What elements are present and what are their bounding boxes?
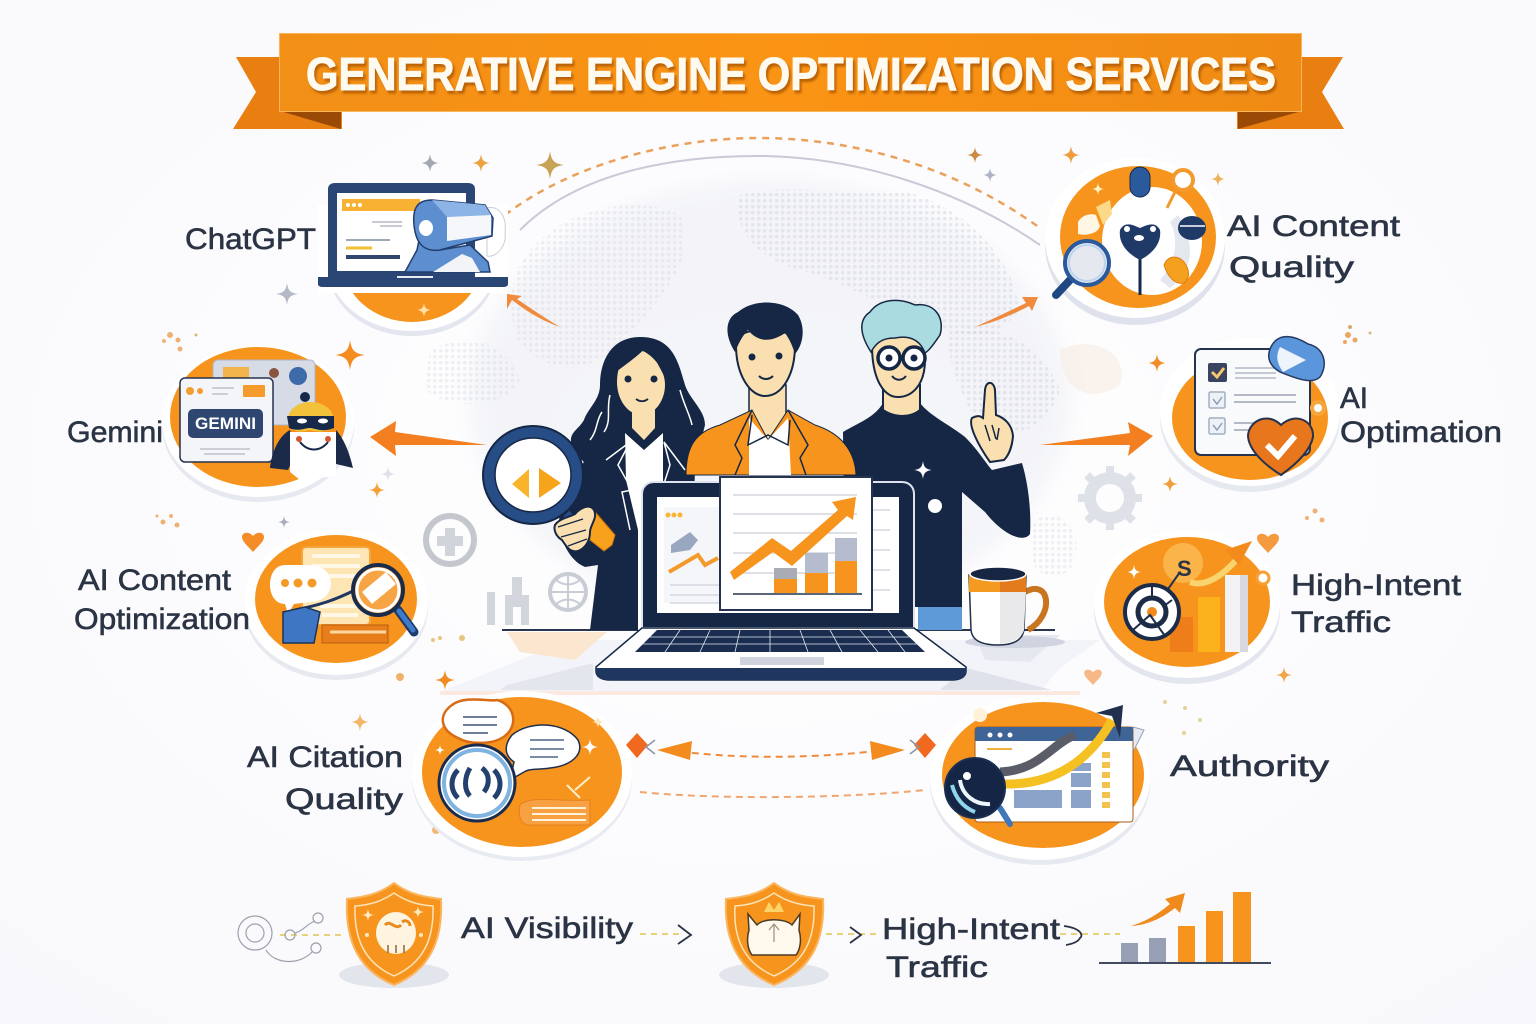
arrow: to ChatGPT [507,294,560,327]
panel: Gemini [67,345,354,502]
figure: man with glasses [843,300,1030,630]
icon: laptop with printer [318,183,508,317]
figure: woman [559,337,705,630]
label: AI Content [78,564,232,597]
label [1227,210,1401,284]
label: Optimization [74,603,250,636]
arrow: to AI Optimation [1040,422,1153,456]
panel: AI Citation Quality [247,691,632,861]
label: AI Citation [247,741,403,774]
label: ChatGPT [185,223,316,256]
panel: AI Content Quality [1045,158,1401,325]
desk [440,629,1100,695]
panel: AI Content Optimization [74,529,428,680]
chart card on laptop [720,477,872,610]
bottom flow: AI Visibility to High-Intent Traffic [238,883,1271,988]
label: Quality [285,783,403,816]
icon: browser window with arrow and magnifier [945,705,1144,824]
label: Traffic [1291,606,1391,639]
label: High-Intent Traffic [882,913,1061,984]
label: Authority [1170,750,1329,783]
panel: Authority [930,696,1329,865]
panel: ChatGPT [185,183,508,336]
icon: shield two [719,883,829,988]
chart: growth bars [1099,892,1271,964]
laptop [596,482,966,680]
magnifier held by woman [483,426,615,551]
icon: gear [1078,466,1142,530]
arrow: dashed links between lower panels [626,733,936,797]
label: AI [1340,382,1368,415]
label [1291,569,1462,639]
label [247,741,403,816]
label: High-Intent [1291,569,1462,602]
panel: AI Optimation [1160,337,1502,492]
label: High-Intent Traffic: Traffic [886,951,988,984]
label: Quality [1229,251,1354,284]
title text: GENERATIVE ENGINE OPTIMIZATION SERVICES [306,48,1276,100]
label [74,564,250,636]
label: AI Content [1227,210,1401,243]
arrow: to AI Content Quality [975,297,1038,327]
label: High-Intent Traffic: High-Intent [882,913,1061,946]
icon: quality pin and magnifier [1056,167,1206,295]
icon: chat bubbles and citation badge [435,699,604,825]
label [1340,382,1502,449]
dashed connectors [280,925,1120,945]
sparkles [156,146,1372,834]
panel: High-Intent Traffic [1094,530,1462,684]
icon: network doodle [238,913,323,962]
icon: shield one [339,883,449,988]
label: Gemini [67,416,163,449]
label: AI Visibility: AI Visibility [461,912,633,945]
text: GEMINI: GEMINI [195,414,256,433]
dashed arc [505,138,1040,228]
icon: target, growth bars and arrow [1125,541,1269,652]
world map backdrop [425,156,1122,620]
icon: document, speech bubble and magnifier [270,547,414,643]
mug [965,567,1065,648]
gray decorative icons behind the team [426,516,586,625]
label: Optimation [1340,416,1502,449]
arrow: to Gemini [370,421,487,456]
figure: central man [686,303,856,475]
icon: target, growth bars and arrow: S [1177,556,1192,581]
icon: checklist with bubble and heart [1195,337,1324,475]
icon: Gemini cards and robot [180,360,353,480]
title banner [233,33,1344,129]
